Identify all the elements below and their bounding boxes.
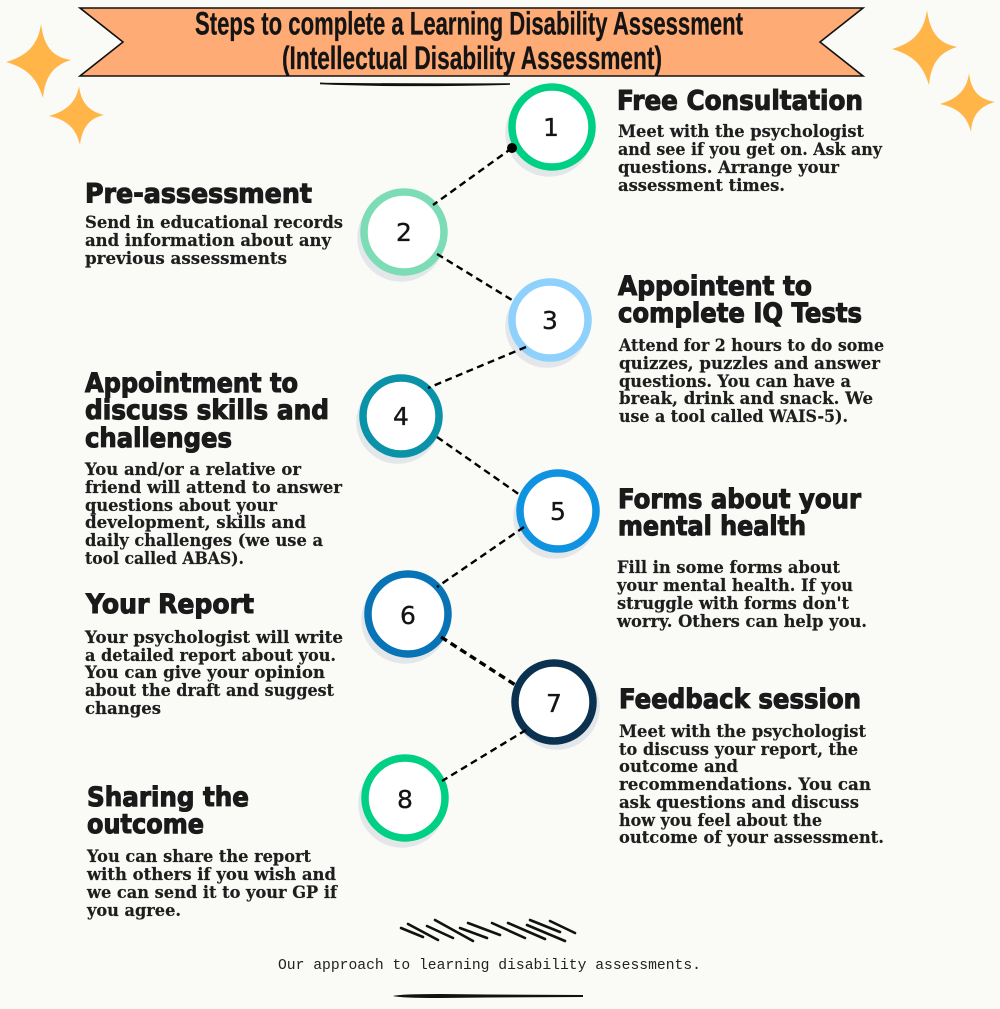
panel: step 4 skills and challenges: challenges <box>85 423 232 454</box>
step 4 circle <box>360 378 439 460</box>
step 3 circle <box>509 282 588 364</box>
panel: step 2 pre-assessment: Pre-assessment <box>85 178 312 210</box>
panel: step 7 feedback session: recommendations. You can <box>619 775 871 794</box>
panel: step 3 IQ tests: break, drink and snack. We <box>619 389 873 408</box>
panel: step 6 your report: You can give your opinion <box>84 663 325 682</box>
panel: step 7 feedback session: Meet with the psychologist <box>619 722 866 741</box>
title banner: Steps to complete a Learning Disability Assessment <box>195 6 743 42</box>
title banner: (Intellectual Disability Assessment) <box>282 40 662 76</box>
panel: step 6 your report: Your Report <box>85 589 254 620</box>
panel: step 8 sharing the outcome: we can send it to your GP if <box>86 883 338 902</box>
panel: step 5 mental health forms: Fill in some forms about <box>617 558 840 577</box>
title underline <box>320 84 510 85</box>
panel: step 1 free consultation: questions. Arrange your <box>618 158 839 177</box>
step 2 circle <box>361 192 444 278</box>
step 7 circle: 7 <box>546 689 562 718</box>
sparkles top right <box>892 10 995 132</box>
sparkles top left <box>6 24 104 145</box>
step 8 circle: 8 <box>397 785 413 814</box>
panel: step 7 feedback session: outcome of your assessment. <box>619 828 884 847</box>
panel: step 5 mental health forms: struggle with forms don't <box>617 594 849 613</box>
panel: step 8 sharing the outcome <box>86 782 338 920</box>
panel: step 8 sharing the outcome: you agree. <box>86 901 181 920</box>
panel: step 4 skills and challenges: tool called ABAS). <box>85 549 244 568</box>
panel: step 7 feedback session: outcome and <box>619 757 738 776</box>
panel: step 4 skills and challenges: discuss skills and <box>85 395 329 426</box>
panel: step 1 free consultation <box>617 86 882 195</box>
step 6 circle <box>365 574 448 660</box>
panel: step 5 mental health forms: Forms about your <box>618 484 862 515</box>
footer caption: Our approach to learning disability assessments. <box>278 958 701 974</box>
panel: step 3 IQ tests: use a tool called WAIS-5). <box>619 407 848 426</box>
panel: step 7 feedback session: to discuss your report, the <box>619 740 858 759</box>
panel: step 7 feedback session: ask questions and discuss <box>619 793 859 812</box>
panel: step 2 pre-assessment: and information about any <box>85 231 331 250</box>
dashed connectors between steps <box>428 143 526 781</box>
panel: step 1 free consultation: Free Consultation <box>617 86 863 116</box>
panel: step 5 mental health forms <box>616 484 867 631</box>
panel: step 7 feedback session <box>619 684 884 847</box>
panel: step 4 skills and challenges: questions about your <box>85 496 277 515</box>
panel: step 6 your report: about the draft and suggest <box>85 681 334 700</box>
footer underline <box>393 994 583 998</box>
panel: step 5 mental health forms: your mental health. If you <box>616 576 853 595</box>
panel: step 3 IQ tests: Attend for 2 hours to do some <box>618 336 884 355</box>
step 2 circle: 2 <box>396 218 412 247</box>
panel: step 3 IQ tests <box>618 271 884 426</box>
step 8 circle <box>362 758 445 844</box>
panel: step 8 sharing the outcome: Sharing the <box>87 782 249 813</box>
panel: step 4 skills and challenges: development, skills and <box>85 513 306 532</box>
panel: step 5 mental health forms: mental health <box>618 511 806 542</box>
panel: step 2 pre-assessment: previous assessments <box>85 249 287 268</box>
panel: step 4 skills and challenges: You and/or a relative or <box>84 460 301 479</box>
panel: step 4 skills and challenges: daily challenges (we use a <box>85 531 323 550</box>
step 1 circle: 1 <box>543 113 559 142</box>
panel: step 6 your report <box>84 589 343 718</box>
panel: step 2 pre-assessment: Send in educational records <box>85 213 343 232</box>
panel: step 4 skills and challenges: Appointment to <box>85 368 298 399</box>
panel: step 3 IQ tests: quizzes, puzzles and answer <box>619 354 880 373</box>
panel: step 8 sharing the outcome: outcome <box>87 809 204 840</box>
panel: step 6 your report: changes <box>85 699 161 718</box>
step 4 circle: 4 <box>393 402 409 431</box>
scribble decoration <box>401 920 575 941</box>
panel: step 3 IQ tests: complete IQ Tests <box>618 298 862 329</box>
step 6 circle: 6 <box>400 601 416 630</box>
panel: step 1 free consultation: and see if you get on. Ask any <box>618 140 882 159</box>
step 1 circle <box>509 87 592 173</box>
panel: step 4 skills and challenges <box>84 368 342 568</box>
panel: step 1 free consultation: assessment times. <box>618 176 785 195</box>
panel: step 1 free consultation: Meet with the psychologist <box>618 122 864 141</box>
panel: step 3 IQ tests: questions. You can have a <box>619 372 851 391</box>
panel: step 5 mental health forms: worry. Others can help you. <box>616 612 867 631</box>
panel: step 8 sharing the outcome: You can share the report <box>86 847 311 866</box>
panel: step 8 sharing the outcome: with others if you wish and <box>86 865 336 884</box>
step 5 circle: 5 <box>550 497 566 526</box>
panel: step 3 IQ tests: Appointent to <box>618 271 812 302</box>
panel: step 6 your report: Your psychologist will write <box>84 628 343 647</box>
panel: step 6 your report: a detailed report about you. <box>85 646 336 665</box>
step 7 circle <box>515 663 596 746</box>
panel: step 7 feedback session: how you feel about the <box>619 811 822 830</box>
panel: step 2 pre-assessment <box>85 178 343 268</box>
title banner <box>80 6 863 76</box>
panel: step 4 skills and challenges: friend will attend to answer <box>85 478 342 497</box>
step 5 circle <box>517 473 596 555</box>
step 3 circle: 3 <box>542 306 558 335</box>
panel: step 7 feedback session: Feedback session <box>619 684 861 715</box>
